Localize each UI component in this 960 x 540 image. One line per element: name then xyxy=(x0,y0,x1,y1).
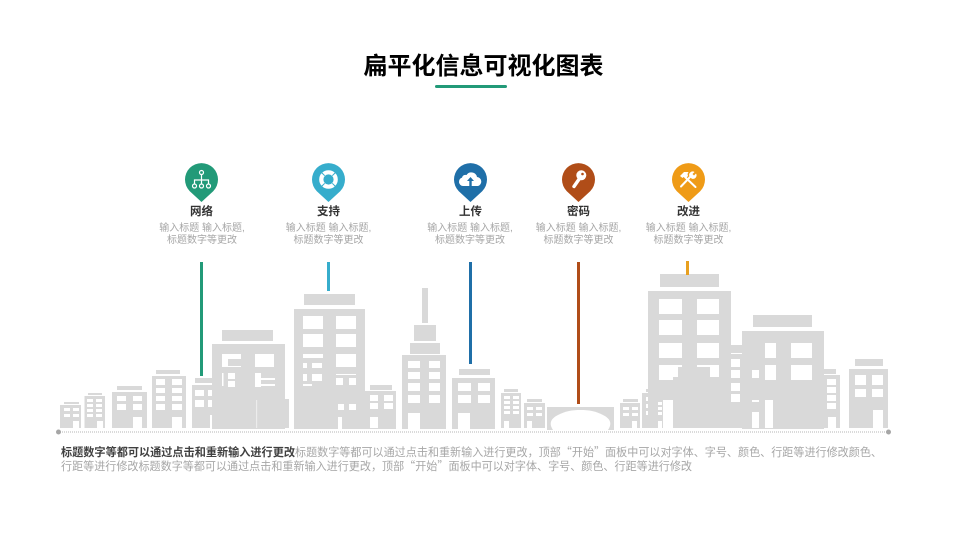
large building right xyxy=(648,274,731,400)
building 4 xyxy=(152,370,186,428)
wide building right xyxy=(742,315,824,429)
large building left xyxy=(212,330,285,429)
building 20 xyxy=(849,359,888,428)
building 9 xyxy=(365,385,396,429)
title: 扁平化信息可视化图表 xyxy=(364,53,604,80)
description: 输入标题 输入标题, xyxy=(646,221,731,234)
building 1 xyxy=(60,402,81,428)
label: 改进 xyxy=(677,204,700,218)
title underline xyxy=(435,85,507,88)
bridge xyxy=(547,407,614,430)
label: 网络 xyxy=(190,204,213,218)
icon: key pin xyxy=(562,163,595,202)
description line 2: 标题数字等更改 xyxy=(544,233,614,246)
description: 输入标题 输入标题, xyxy=(286,221,371,234)
connector line: 上传 xyxy=(469,262,472,364)
connector line: 改进 xyxy=(686,261,689,275)
connector line: 密码 xyxy=(577,262,580,404)
description line 2: 标题数字等更改 xyxy=(435,233,505,246)
item: 改进 xyxy=(646,163,731,246)
description line 2: 标题数字等更改 xyxy=(167,233,237,246)
tallest building xyxy=(294,294,365,429)
label: 上传 xyxy=(459,204,482,218)
bottom text block xyxy=(61,444,882,474)
narrow middle building xyxy=(730,345,765,428)
icon: network pin xyxy=(185,163,218,202)
description line 2: 标题数字等更改 xyxy=(294,233,364,246)
description: 输入标题 输入标题, xyxy=(159,221,245,234)
spire tower xyxy=(402,288,446,429)
line 1: 标题数字等都可以通过点击和重新输入进行更改，顶部“开始”面板中可以对字体、字号、颜色、行距等进行修改颜色、 xyxy=(295,444,882,460)
icon: cloud upload pin xyxy=(454,163,487,202)
item: 支持 xyxy=(286,163,371,246)
item: 上传 xyxy=(427,163,513,246)
connector line: 网络 xyxy=(200,262,203,376)
building 19 xyxy=(824,369,840,428)
ground dotted line xyxy=(56,430,891,434)
description: 输入标题 输入标题, xyxy=(536,221,621,234)
icon: tools pin xyxy=(672,163,705,202)
bold lead-in: 标题数字等都可以通过点击和重新输入进行更改 xyxy=(61,445,295,459)
item: 密码 xyxy=(536,163,621,246)
connector line: 支持 xyxy=(327,262,330,291)
overlapping building xyxy=(256,399,289,428)
description: 输入标题 输入标题, xyxy=(427,221,513,234)
description line 2: 标题数字等更改 xyxy=(654,233,724,246)
item: 网络 xyxy=(159,163,245,246)
building 12 xyxy=(501,389,521,428)
building 3 xyxy=(112,386,147,428)
building 13 xyxy=(524,399,545,428)
lower block right xyxy=(648,367,731,428)
line 2: 行距等进行修改标题数字等都可以通过点击和重新输入进行更改，顶部“开始”面板中可以对字体、字号、颜色、行距等进行修改 xyxy=(61,458,692,474)
icon: lifebuoy pin xyxy=(312,163,345,202)
building 11 xyxy=(452,369,495,429)
building 2 xyxy=(84,393,105,428)
building 5 front xyxy=(192,378,213,428)
building 15 xyxy=(642,389,663,428)
city skyline xyxy=(60,274,888,430)
building 14 xyxy=(620,399,640,428)
label: 支持 xyxy=(317,204,340,218)
label: 密码 xyxy=(567,204,590,218)
